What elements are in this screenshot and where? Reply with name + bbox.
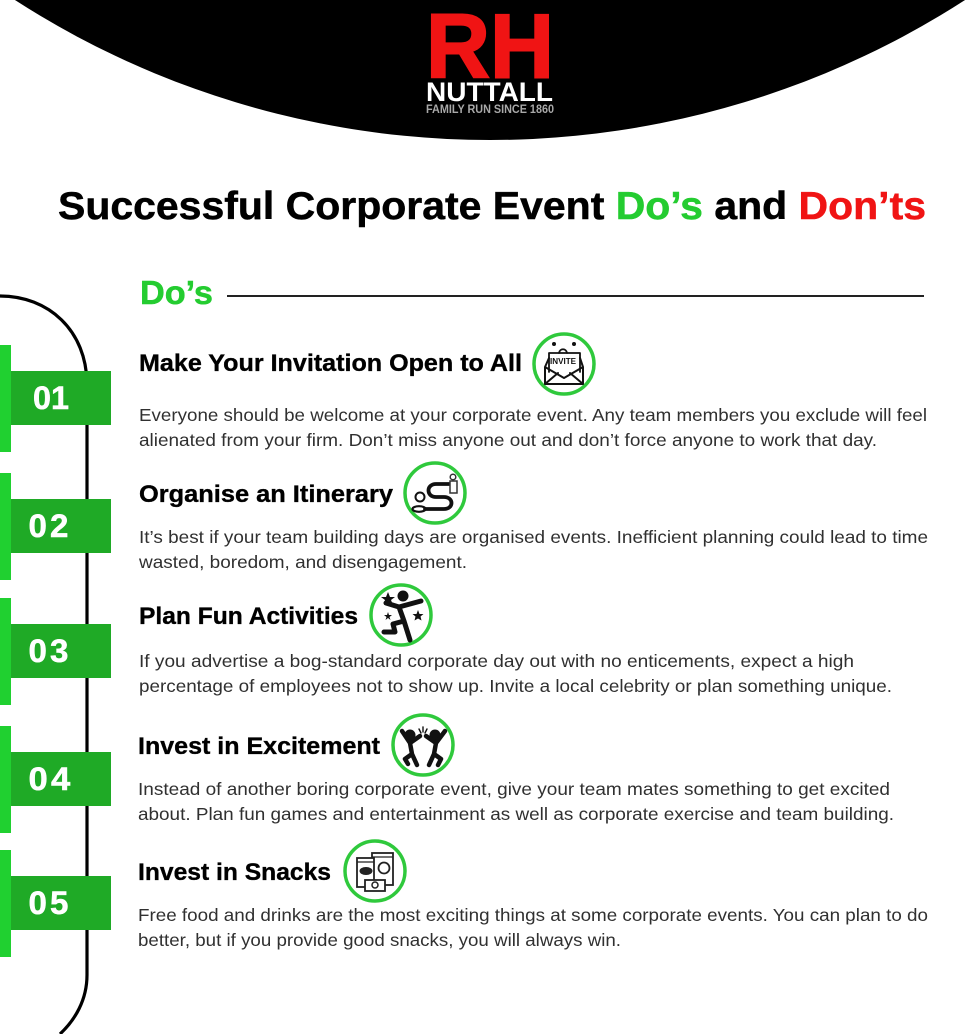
step marker 03 [0,598,111,705]
item 3 heading: Plan Fun Activities [139,603,358,630]
logo: NUTTALL [426,77,553,107]
item 1 text: Everyone should be welcome at your corporate event. Any team members you exclude will feel [139,405,927,425]
item 3 text: If you advertise a bog-standard corporate day out with no enticements, expect a high [139,651,854,671]
item 4 text: about. Plan fun games and entertainment as well as corporate exercise and team building. [138,804,894,824]
item 5 text: Free food and drinks are the most exciting things at some corporate events. You can plan to do [138,905,928,925]
item 2 text [138,527,928,572]
item 5 heading: Invest in Snacks [138,859,331,886]
item 1 heading: Make Your Invitation Open to All [139,350,522,377]
item 4 text: Instead of another boring corporate event, give your team mates something to get excited [138,779,890,799]
icon: jumping figure with stars [371,585,431,645]
icon: invitation envelope [534,334,594,394]
icon: snack packets [345,841,405,901]
icon: itinerary route [405,463,465,523]
step marker 04: 04 [28,761,74,797]
timeline curve [0,296,87,1034]
step marker 02: 02 [28,508,72,544]
section heading: Do's: Do’s [140,274,213,311]
step marker 05 [0,850,111,957]
logo: FAMILY RUN SINCE 1860 [426,104,554,116]
step marker 01 [0,345,111,452]
item 5 text [138,905,928,950]
icon: two people high-fiving [393,715,453,775]
item 2 text: wasted, boredom, and disengagement. [138,552,467,572]
item 2 heading: Organise an Itinerary [139,481,394,508]
black header arc [0,0,979,140]
step marker 04 [0,726,111,833]
step marker 01: 01 [33,380,69,416]
step marker 05: 05 [28,885,72,921]
item 4 text [138,779,894,824]
title: Successful Corporate Event Do’s and Don’ts [58,185,926,228]
item 2 text: It’s best if your team building days are organised events. Inefficient planning could lead to time [139,527,928,547]
item 1 text [139,405,927,450]
item 3 text: percentage of employees not to show up. Invite a local celebrity or plan something unique. [139,676,892,696]
item 5 text: better, but if you provide good snacks, you will always win. [138,930,621,950]
item 4 heading: Invest in Excitement [138,733,380,760]
item 3 text [139,651,892,696]
item 1 text: alienated from your firm. Don’t miss anyone out and don’t force anyone to work that day. [139,430,877,450]
step marker 03: 03 [28,633,72,669]
icon: invitation envelope: INVITE [550,357,577,366]
step marker 02 [0,473,111,580]
